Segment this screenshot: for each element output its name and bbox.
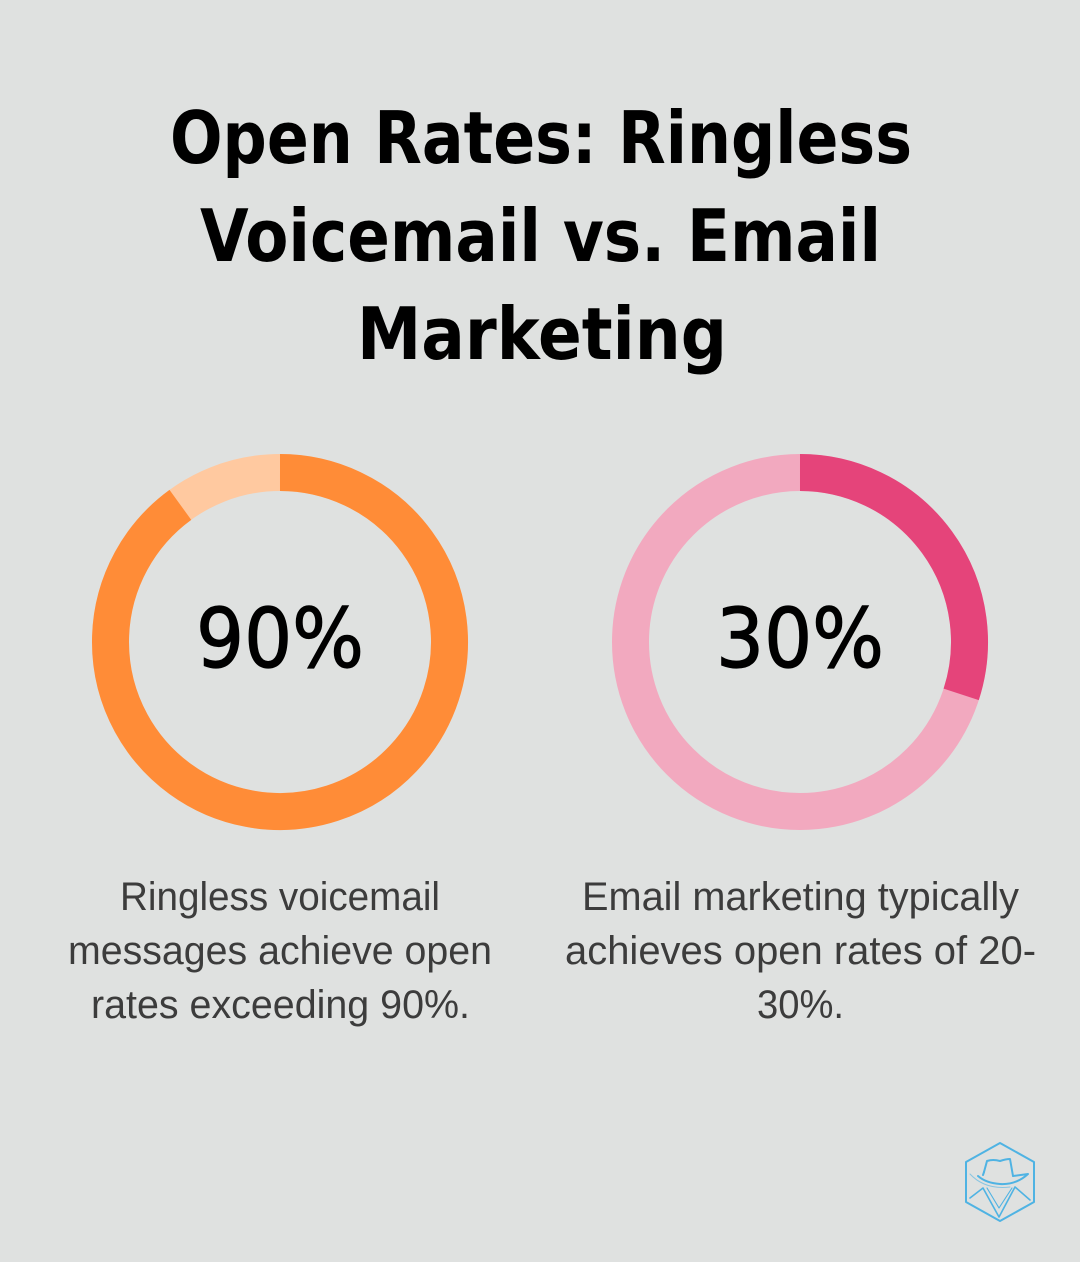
donut chart: 90%: [110, 472, 450, 812]
panel: ringless voicemail: [68, 472, 492, 1027]
description: email: Email marketing typically: [582, 875, 1019, 919]
title: Marketing: [357, 292, 727, 376]
value: 90%: 90%: [196, 592, 364, 687]
donut chart: 30%: [630, 472, 970, 812]
title: Voicemail vs. Email: [200, 194, 881, 278]
panel: email marketing: [565, 472, 1036, 1027]
title: [170, 96, 912, 376]
description: email: [565, 875, 1036, 1027]
description: voicemail: messages achieve open: [68, 929, 492, 973]
icon: spy logo: [966, 1143, 1034, 1221]
description: voicemail: Ringless voicemail: [120, 875, 440, 919]
description: voicemail: rates exceeding 90%.: [91, 983, 470, 1027]
description: voicemail: [68, 875, 492, 1027]
description: email: achieves open rates of 20-: [565, 929, 1036, 973]
title: Open Rates: Ringless: [170, 96, 912, 180]
value: 30%: 30%: [716, 592, 884, 687]
description: email: 30%.: [757, 983, 844, 1027]
